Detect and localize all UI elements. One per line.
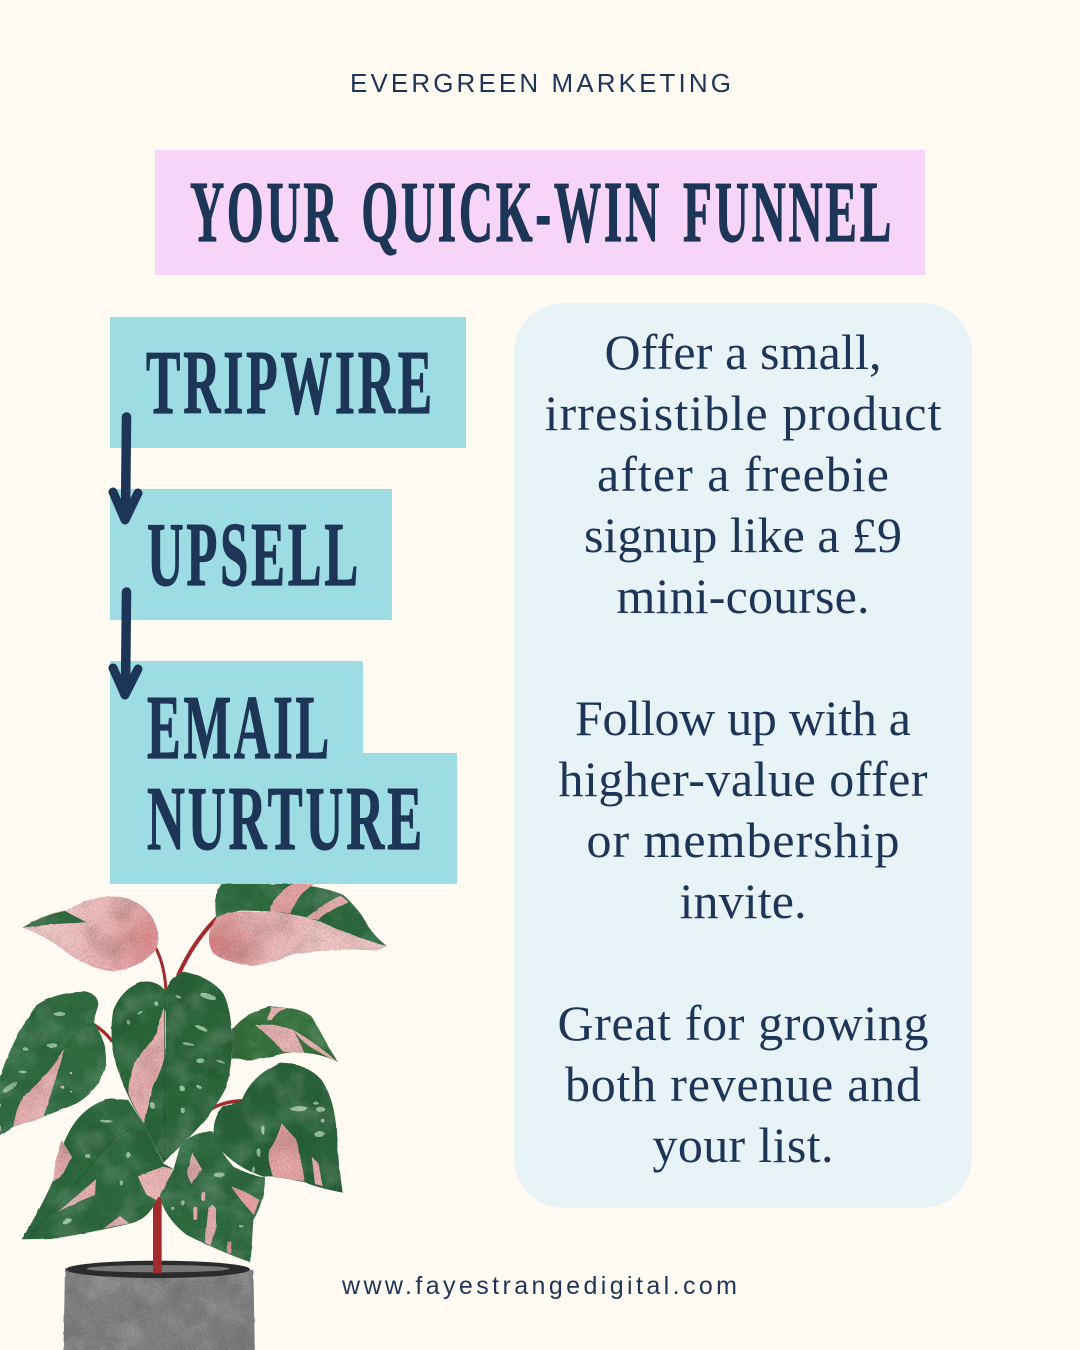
stems xyxy=(94,918,242,1273)
text block: upsell description xyxy=(558,690,928,929)
text block: benefit xyxy=(558,995,928,1173)
text block: tripwire description: mini-course. xyxy=(616,568,870,624)
step: email nurture xyxy=(110,661,457,884)
illustration: potted plant xyxy=(0,884,387,1350)
text block: benefit: both revenue and xyxy=(565,1056,921,1112)
leaf: bottom centre xyxy=(160,1132,265,1263)
text block: upsell description: invite. xyxy=(680,873,806,929)
step: email nurture: NURTURE xyxy=(147,768,425,869)
eyebrow heading: EVERGREEN MARKETING xyxy=(350,68,731,98)
leaf: left green xyxy=(0,992,106,1135)
arrow: tripwire to upsell xyxy=(113,417,138,520)
text block: upsell description: Follow up with a xyxy=(575,690,911,746)
step: upsell xyxy=(110,489,392,620)
step: tripwire xyxy=(110,317,466,448)
text block: tripwire description: Offer a small, xyxy=(604,324,882,380)
step: tripwire: TRIPWIRE xyxy=(146,332,435,433)
text block: upsell description: higher-value offer xyxy=(558,751,928,807)
text block: benefit: your list. xyxy=(652,1117,834,1173)
leaf: centre large xyxy=(111,972,232,1163)
text block: tripwire description: signup like a £9 xyxy=(584,507,902,563)
text block: benefit: Great for growing xyxy=(558,995,928,1051)
text block: tripwire description xyxy=(544,324,942,624)
leaf: right small xyxy=(232,1007,338,1063)
leaf: bottom left xyxy=(22,1098,174,1239)
step: upsell: UPSELL xyxy=(147,504,361,605)
pot xyxy=(63,1261,255,1350)
title banner xyxy=(155,150,925,275)
panel: description xyxy=(514,303,972,1208)
leaf: top right pink and green xyxy=(209,884,387,966)
step: email nurture: EMAIL xyxy=(147,677,332,778)
text block: tripwire description: after a freebie xyxy=(597,446,889,502)
text block: upsell description: or membership xyxy=(586,812,900,868)
arrow: upsell to email nurture xyxy=(113,592,138,695)
leaf: right lower xyxy=(214,1063,343,1193)
leaf: top left pink xyxy=(23,896,158,972)
footer url: www.fayestrangedigital.com xyxy=(341,1272,737,1300)
text block: tripwire description: irresistible product xyxy=(544,385,942,441)
